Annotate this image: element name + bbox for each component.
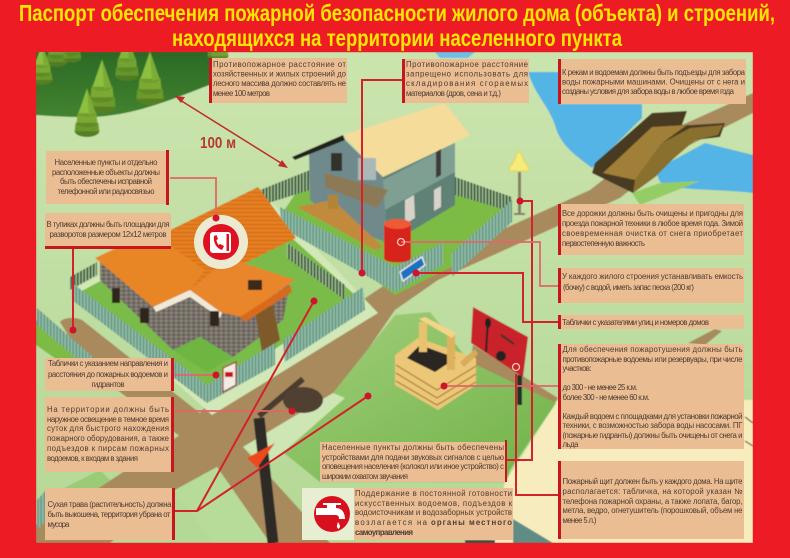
panel: fire shield — [558, 461, 744, 539]
panel: fire water reservoirs: техники, с возможностью забора воды насосами. ПГ — [562, 421, 743, 430]
sign on fence — [223, 362, 236, 392]
panel: access to water bodies: воды пожарными машинами. Очищены от с нега и — [562, 78, 745, 86]
distance label: 100 м — [200, 135, 236, 152]
panel: distance to forest — [209, 58, 347, 103]
panel: responsibility of local government: водоисточникам и водозаборных устройств — [355, 508, 512, 517]
panel: fire water reservoirs: Каждый водоем с площадками для установки пожарной — [562, 412, 742, 421]
panel: water barrel: (бочку) с водой, иметь запас песка (200 кг) — [563, 283, 694, 292]
panel: outdoor lighting: пожарного оборудования, а также — [47, 434, 169, 443]
panel: direction signs — [45, 358, 174, 391]
panel: storage of flammable materials: запрещено использовать для — [406, 70, 528, 78]
panel: water barrel — [558, 268, 744, 303]
panel: turning areas: В тупиках должны быть площадки для — [46, 220, 170, 229]
panel: dry grass: Сухая трава (растительность) должна — [48, 500, 172, 509]
panel: responsibility of local government: искусственных водоемов, подъездов к — [355, 499, 513, 508]
red water barrel — [384, 219, 411, 262]
panel: dry grass — [45, 488, 175, 540]
street lamp with siren — [247, 379, 323, 543]
yard: first house — [72, 190, 378, 415]
panel: clear roads — [558, 204, 744, 255]
distance arrow 100 m — [175, 96, 288, 168]
panel: fire shield: менее 5 л.) — [562, 516, 597, 525]
panel: dry grass: быть выкошена, территория убрана от — [48, 510, 171, 519]
first house — [95, 187, 296, 372]
icon: water tap — [302, 488, 354, 540]
panel: direction signs: расстояния до пожарных водоемов и — [48, 370, 168, 379]
panel: responsibility of local government: Поддержание в постоянной готовности — [355, 489, 512, 498]
panel: outdoor lighting: водоемов, к входам в здания — [47, 454, 138, 463]
panel: fire water reservoirs: Для обеспечения пожаротушения должны быть — [562, 345, 742, 354]
panel: responsibility of local government: самоуправления — [355, 528, 413, 537]
panel: clear roads: проезда пожарной техники в любое время года. Зимой — [562, 219, 743, 228]
title — [19, 0, 775, 51]
panel: clear roads: своевременная очистка от снега приобретает — [562, 229, 743, 238]
panel: distance to forest: Противопожарное расстояние от — [213, 60, 346, 69]
panel: outdoor lighting: подъездов к пирсам пожарных — [47, 444, 169, 453]
panel: fire shield: располагается: табличка, на которой указан № — [562, 487, 742, 496]
panel: street signs: Таблички с указателями улиц и номеров домов — [562, 318, 709, 327]
panel: clear roads: Все дорожки должны быть очищены и пригодны для — [562, 209, 743, 218]
panel: responsibility of local government — [354, 488, 513, 540]
panel: fire water reservoirs: более 300 - не менее 60 к.м. — [562, 393, 650, 402]
panel: turning areas — [45, 213, 171, 249]
fences: second house front — [280, 200, 512, 292]
panel: direction signs: Таблички с указанием направления и — [48, 359, 168, 368]
panel: fire water reservoirs: противопожарные водоемы или резервуары, при числе — [562, 355, 742, 364]
panel: fire water reservoirs — [558, 344, 744, 449]
panel: storage of flammable materials: Противопожарное расстояние — [406, 60, 528, 69]
road network — [36, 93, 753, 543]
panel: outdoor lighting: На территории должны быть — [47, 405, 169, 414]
panel: fire water reservoirs: до 300 - не менее 25 к.м. — [562, 383, 638, 392]
panel: fire water reservoirs: участков: — [562, 364, 592, 373]
panel: access to water bodies — [558, 59, 746, 104]
panel: outdoor lighting: наружное освещение в темное время — [47, 415, 169, 424]
panel: clear roads: первостепенную важность — [562, 239, 645, 248]
panel: responsibility of local government: органы местного — [431, 518, 512, 527]
panel: fire shield: метла, ведро, огнетушитель (порошковый, объем не — [562, 506, 742, 515]
fire shield — [471, 307, 528, 405]
panel: outdoor lighting: суток для быстрого нахождения — [47, 424, 169, 433]
panel: fire water reservoirs: льда — [562, 440, 579, 449]
panel: sound alerts: устройствами для подачи звуковых сигналов с целью — [322, 453, 504, 462]
panel: communication — [46, 150, 169, 205]
panel: storage of flammable materials: материалов (дров, сена и т.д.) — [406, 89, 501, 98]
panel: sound alerts — [320, 440, 507, 482]
panel: communication: расположенные объекты должны — [52, 168, 160, 177]
panel: responsibility of local government: возлагается на — [355, 518, 428, 527]
panel: fire shield: Пожарный щит должен быть у каждого дома. На щите — [562, 477, 742, 486]
fences: dark back fences — [70, 170, 512, 300]
panel: fire shield: телефона пожарной охраны, а также лопата, багор, — [562, 497, 742, 506]
panel: distance to forest: хозяйственных и жилых строений до — [213, 70, 347, 78]
panel: distance to forest: лесного массива должно составлять не — [213, 79, 346, 88]
icon: telephone — [194, 214, 248, 269]
panel: sound alerts: широким охватом звучания — [322, 472, 408, 481]
forest area — [36, 52, 475, 138]
panel: access to water bodies: созданы условия для забора воды в любое время года — [562, 87, 735, 96]
connectors — [70, 80, 558, 511]
panel: dry grass: мусора — [48, 520, 70, 529]
panel: fire water reservoirs: (пожарные гидранты) должны быть очищены от снега и — [562, 431, 742, 440]
panel: direction signs: гидрантов — [92, 380, 124, 389]
river — [528, 72, 753, 193]
panel: storage of flammable materials: складирования сгораемых — [406, 79, 528, 88]
second house — [292, 103, 470, 250]
bridge — [592, 111, 725, 193]
panel: sound alerts: Населенные пункты должны быть обеспечены — [322, 443, 504, 452]
bottom corner house fragment — [465, 519, 553, 543]
panel: access to water bodies: К рекам и водоемам должны быть подъезды для забора — [562, 68, 746, 77]
panel: outdoor lighting — [45, 397, 174, 472]
panel: turning areas: разворотов размером 12х12 метров — [50, 230, 166, 239]
green patch — [268, 312, 556, 482]
title: находящихся на территории населенного пункта — [172, 25, 622, 51]
fences: first house — [37, 283, 365, 530]
panel: water barrel: У каждого жилого строения устанавливать емкость — [562, 272, 743, 281]
panel: street signs — [558, 315, 744, 329]
sand area — [490, 400, 753, 543]
panel: distance to forest: менее 100 метров — [213, 89, 270, 98]
panel: communication: Населенные пункты и отдельно — [54, 158, 158, 167]
blue street sign — [400, 257, 425, 281]
yard: second house — [284, 190, 502, 296]
panel: communication: телефонной или радиосвязью — [58, 187, 155, 196]
panel: sound alerts: оповещения населения (колокол или иное устройство) с — [322, 462, 504, 471]
yellow lamp — [509, 152, 529, 215]
well — [395, 317, 478, 410]
panel: communication: быть обеспечены исправной — [60, 177, 152, 186]
roadside green strips — [36, 320, 110, 488]
panel: storage of flammable materials — [402, 59, 529, 103]
